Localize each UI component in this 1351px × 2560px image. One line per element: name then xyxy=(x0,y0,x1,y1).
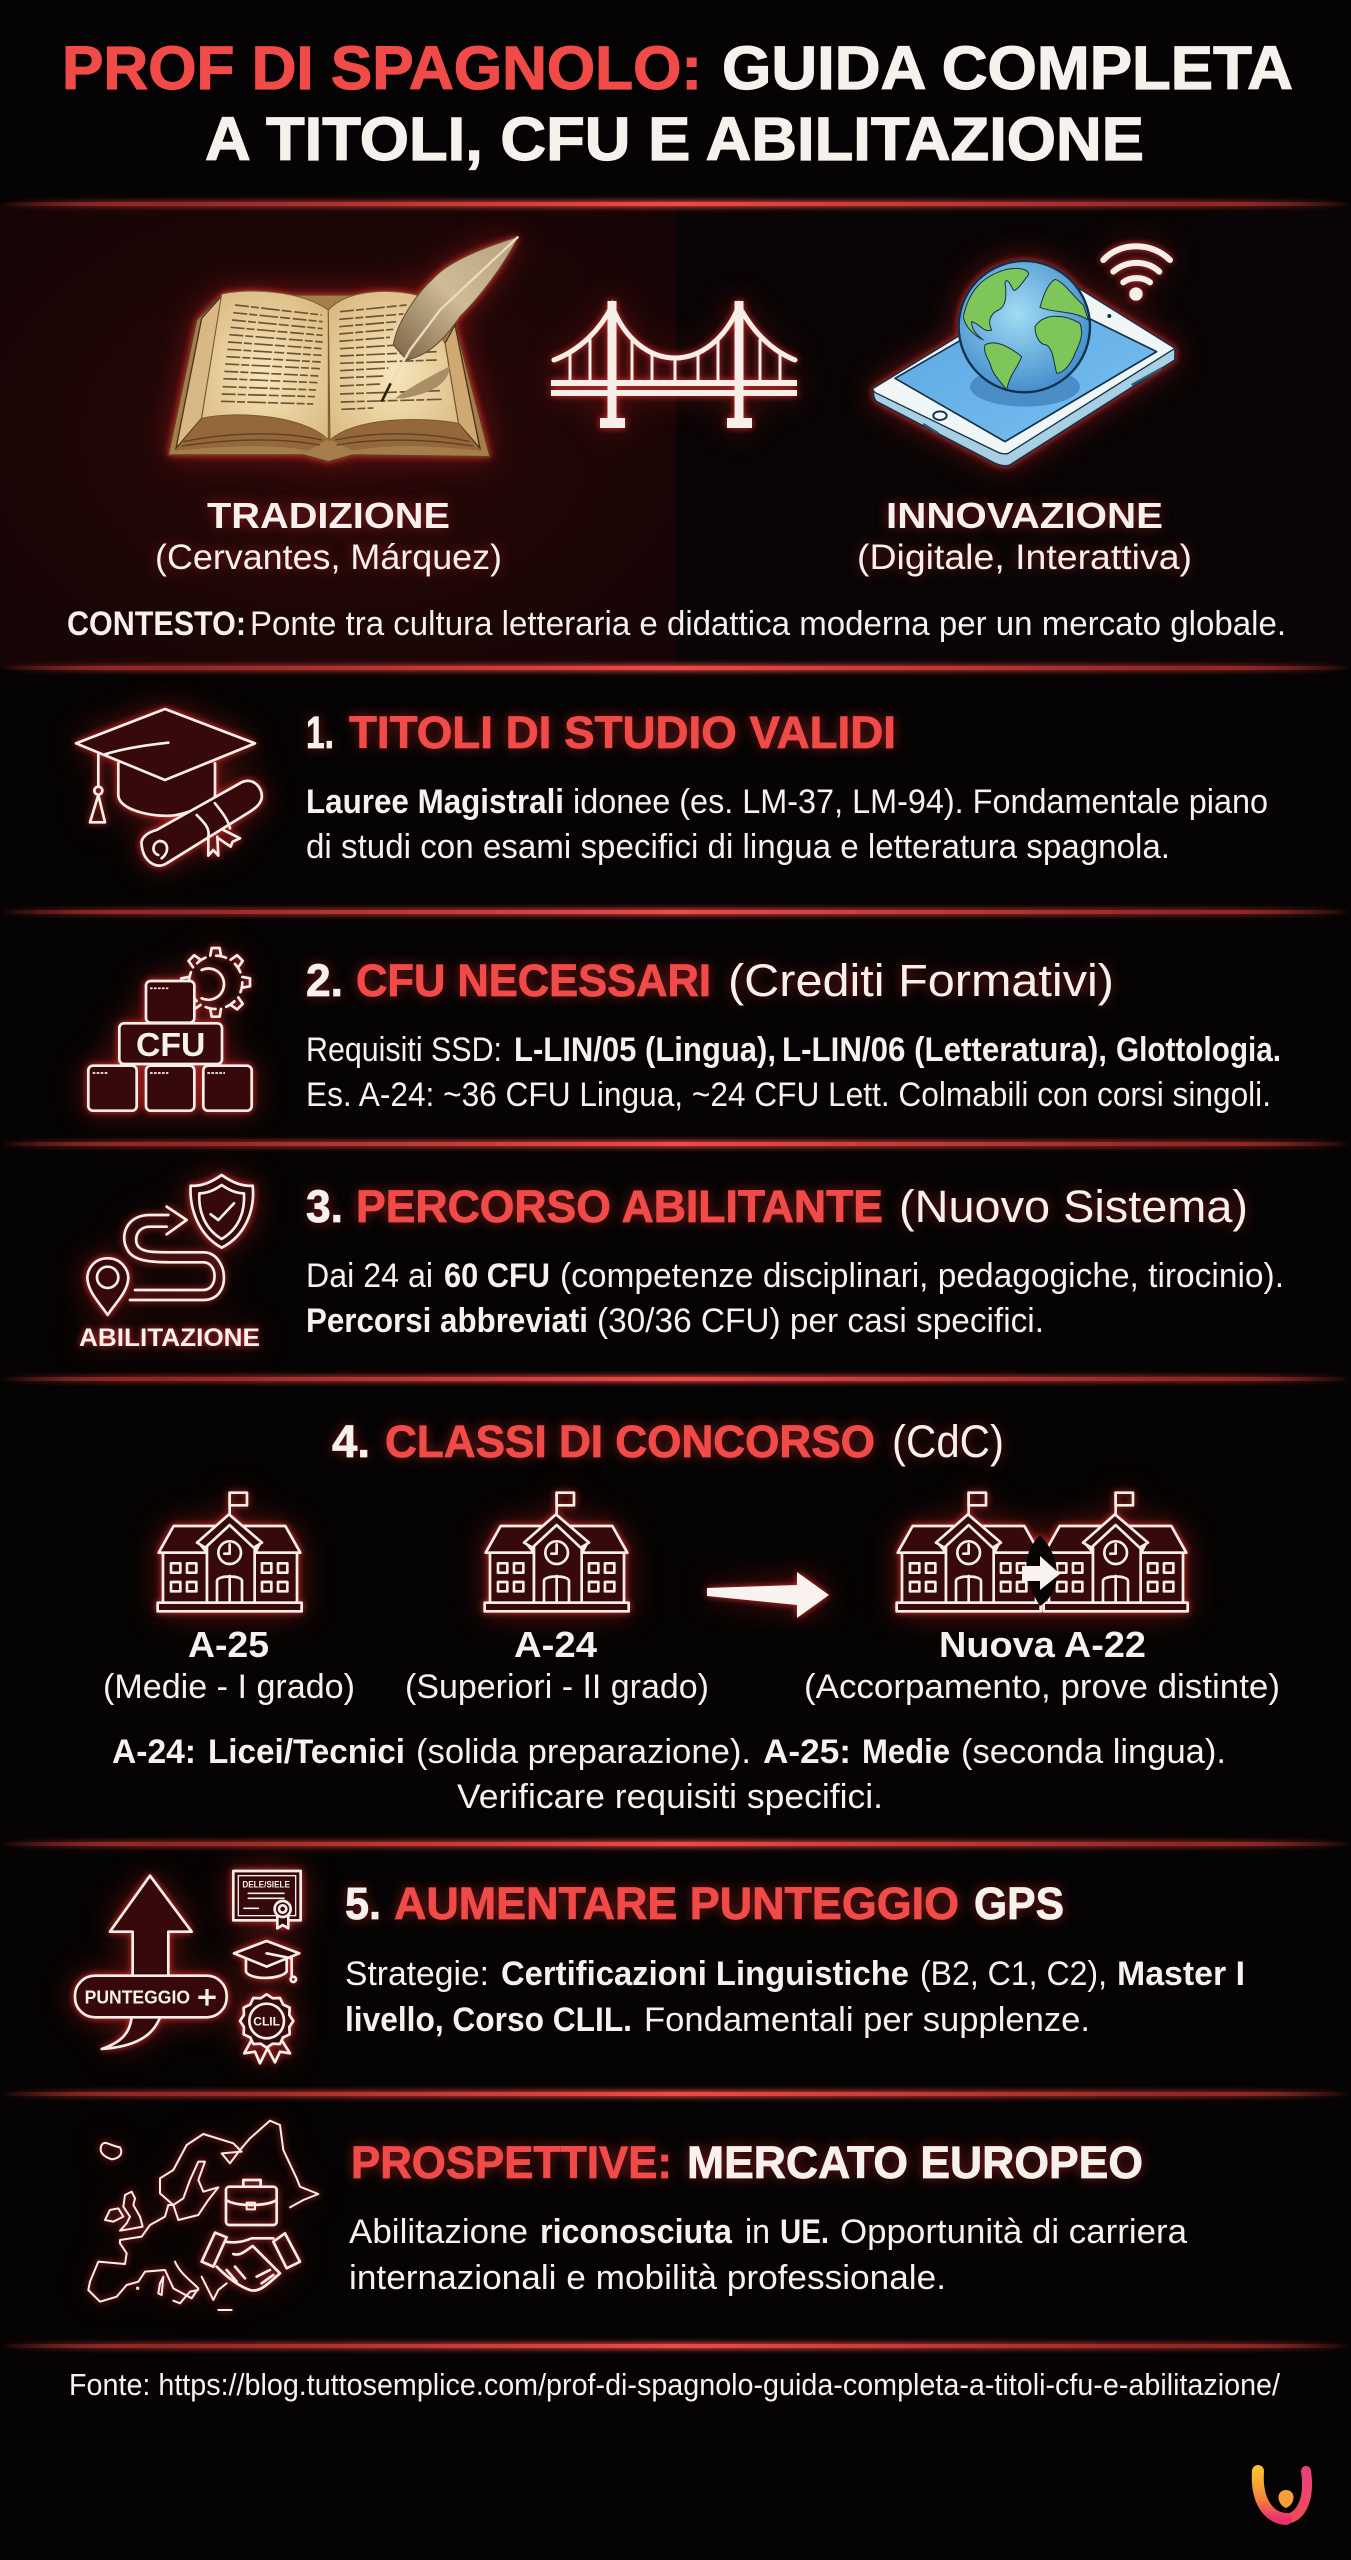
heading: 2. xyxy=(306,955,343,1006)
icon: score arrow with badges: CLIL xyxy=(253,2015,280,2029)
heading: (CdC) xyxy=(892,1416,1004,1467)
body text xyxy=(306,783,1268,866)
note xyxy=(112,1733,1226,1816)
context sentence: CONTESTO: xyxy=(67,605,246,643)
title: GUIDA COMPLETA xyxy=(722,34,1293,102)
heading: MERCATO EUROPEO xyxy=(687,2137,1143,2188)
body text: idonee (es. LM-37, LM-94). Fondamentale piano xyxy=(573,783,1268,821)
heading: 4. xyxy=(332,1416,370,1467)
icon: score arrow with badges xyxy=(75,1871,301,2063)
icon: graduation cap and diploma xyxy=(76,709,262,866)
heading: AUMENTARE PUNTEGGIO xyxy=(394,1878,959,1929)
icon: wifi xyxy=(1103,246,1170,298)
heading xyxy=(306,955,1114,1006)
source line: Fonte: https://blog.tuttosemplice.com/prof-di-spagnolo-guida-completa-a-titoli-cfu-e-abilitazione/ xyxy=(69,2367,1280,2402)
body text xyxy=(345,1955,1245,2039)
body text: internazionali e mobilità professionale. xyxy=(349,2259,946,2297)
body text: L-LIN/06 (Letteratura), xyxy=(782,1031,1107,1069)
note: A-24: xyxy=(112,1733,196,1771)
body text: Abilitazione xyxy=(349,2213,528,2251)
heading: PROSPETTIVE: xyxy=(351,2137,672,2188)
context sentence: Ponte tra cultura letteraria e didattica moderna per un mercato globale. xyxy=(250,605,1286,643)
body text xyxy=(349,2213,1187,2297)
tradition label: (Cervantes, Márquez) xyxy=(155,538,502,577)
arrow xyxy=(707,1572,829,1618)
icon: CFU blocks and gear xyxy=(88,948,252,1111)
note: Licei/Tecnici xyxy=(208,1733,405,1771)
body text: Requisiti SSD: xyxy=(306,1031,502,1069)
body text: Fondamentali per supplenze. xyxy=(644,2001,1090,2039)
body text: Master I xyxy=(1117,1955,1245,1993)
body text: in xyxy=(745,2213,770,2251)
note: (solida preparazione). xyxy=(416,1733,751,1771)
body text: 60 CFU xyxy=(444,1257,550,1295)
body text: UE. xyxy=(780,2213,829,2251)
body text: (30/36 CFU) per casi specifici. xyxy=(597,1302,1044,1340)
heading xyxy=(306,1181,1248,1232)
note: A-25: xyxy=(763,1733,851,1771)
body text: Dai 24 ai xyxy=(306,1257,433,1295)
tradition label xyxy=(155,495,502,577)
body text: Glottologia. xyxy=(1116,1031,1281,1069)
icon: score arrow with badges: PUNTEGGIO xyxy=(85,1986,190,2007)
label A-25: A-25 xyxy=(188,1624,269,1665)
heading: CLASSI DI CONCORSO xyxy=(385,1416,875,1467)
panel: section 5 GPS score xyxy=(75,1871,1245,2063)
heading: GPS xyxy=(974,1878,1064,1929)
label A-24: (Superiori - II grado) xyxy=(405,1668,709,1706)
panel: European market outlook xyxy=(88,2121,1187,2310)
icon: bridge xyxy=(551,301,797,428)
body text: livello, Corso CLIL. xyxy=(345,2001,632,2039)
label A-24 xyxy=(405,1624,709,1706)
icon: school A-25 xyxy=(158,1493,302,1611)
note: Verificare requisiti specifici. xyxy=(457,1778,883,1816)
body text: Opportunità di carriera xyxy=(840,2213,1187,2251)
panel background: tradition side xyxy=(0,204,676,668)
icon: score arrow with badges: DELE/SIELE xyxy=(242,1880,290,1890)
innovation label: (Digitale, Interattiva) xyxy=(857,538,1192,577)
panel background: innovation side xyxy=(676,204,1351,668)
logo xyxy=(1258,2471,1307,2519)
panel: section 3 pathway xyxy=(79,1175,1284,1352)
heading: PERCORSO ABILITANTE xyxy=(356,1181,883,1232)
icon: tablet with globe and wifi xyxy=(873,246,1175,466)
body text: Strategie: xyxy=(345,1955,489,1993)
panel: context xyxy=(0,204,1351,668)
heading: 1. xyxy=(306,707,334,758)
heading: (Crediti Formativi) xyxy=(728,955,1114,1006)
panel: section 4 competition classes xyxy=(103,1416,1280,1816)
body text: (competenze disciplinari, pedagogiche, tirocinio). xyxy=(560,1257,1284,1295)
body text: Certificazioni Linguistiche xyxy=(501,1955,909,1993)
panel: section 1 degrees xyxy=(76,707,1268,866)
body text: Lauree Magistrali xyxy=(306,783,564,821)
icon: Europe map with briefcase and handshake xyxy=(88,2121,318,2310)
label A-25: (Medie - I grado) xyxy=(103,1668,355,1706)
body text: di studi con esami specifici di lingua e letteratura spagnola. xyxy=(306,828,1170,866)
heading: (Nuovo Sistema) xyxy=(899,1181,1248,1232)
icon: merged schools xyxy=(897,1493,1188,1611)
heading: CFU NECESSARI xyxy=(356,955,711,1006)
body text: L-LIN/05 (Lingua), xyxy=(514,1031,776,1069)
icon: route, shield and pin xyxy=(79,1175,260,1352)
tradition label: TRADIZIONE xyxy=(207,495,450,536)
heading: 5. xyxy=(345,1878,381,1929)
body text xyxy=(306,1257,1284,1340)
heading: TITOLI DI STUDIO VALIDI xyxy=(349,707,896,758)
note: (seconda lingua). xyxy=(961,1733,1226,1771)
body text: (B2, C1, C2), xyxy=(920,1955,1107,1993)
icon: CFU blocks and gear: CFU xyxy=(136,1027,205,1064)
heading: 3. xyxy=(306,1181,343,1232)
title xyxy=(62,34,1293,173)
body text: Percorsi abbreviati xyxy=(306,1302,588,1340)
title: A TITOLI, CFU E ABILITAZIONE xyxy=(205,105,1144,173)
note: Medie xyxy=(862,1733,950,1771)
heading xyxy=(351,2137,1143,2188)
body text: Es. A-24: ~36 CFU Lingua, ~24 CFU Lett. Colmabili con corsi singoli. xyxy=(306,1076,1271,1114)
icon: route, shield and pin: ABILITAZIONE xyxy=(79,1324,260,1352)
icon: open book with quill xyxy=(168,237,518,462)
body text: riconosciuta xyxy=(540,2213,733,2251)
title: PROF DI SPAGNOLO: xyxy=(62,34,702,102)
label A-24: A-24 xyxy=(514,1624,597,1665)
label Nuova A-22 xyxy=(804,1624,1280,1706)
innovation label: INNOVAZIONE xyxy=(886,495,1163,536)
innovation label xyxy=(857,495,1192,577)
panel: section 2 credits xyxy=(88,948,1281,1114)
body text xyxy=(306,1031,1281,1114)
label Nuova A-22: (Accorpamento, prove distinte) xyxy=(804,1668,1280,1706)
label Nuova A-22: Nuova A-22 xyxy=(939,1624,1146,1665)
icon: school A-24 xyxy=(485,1493,629,1611)
label A-25 xyxy=(103,1624,355,1706)
